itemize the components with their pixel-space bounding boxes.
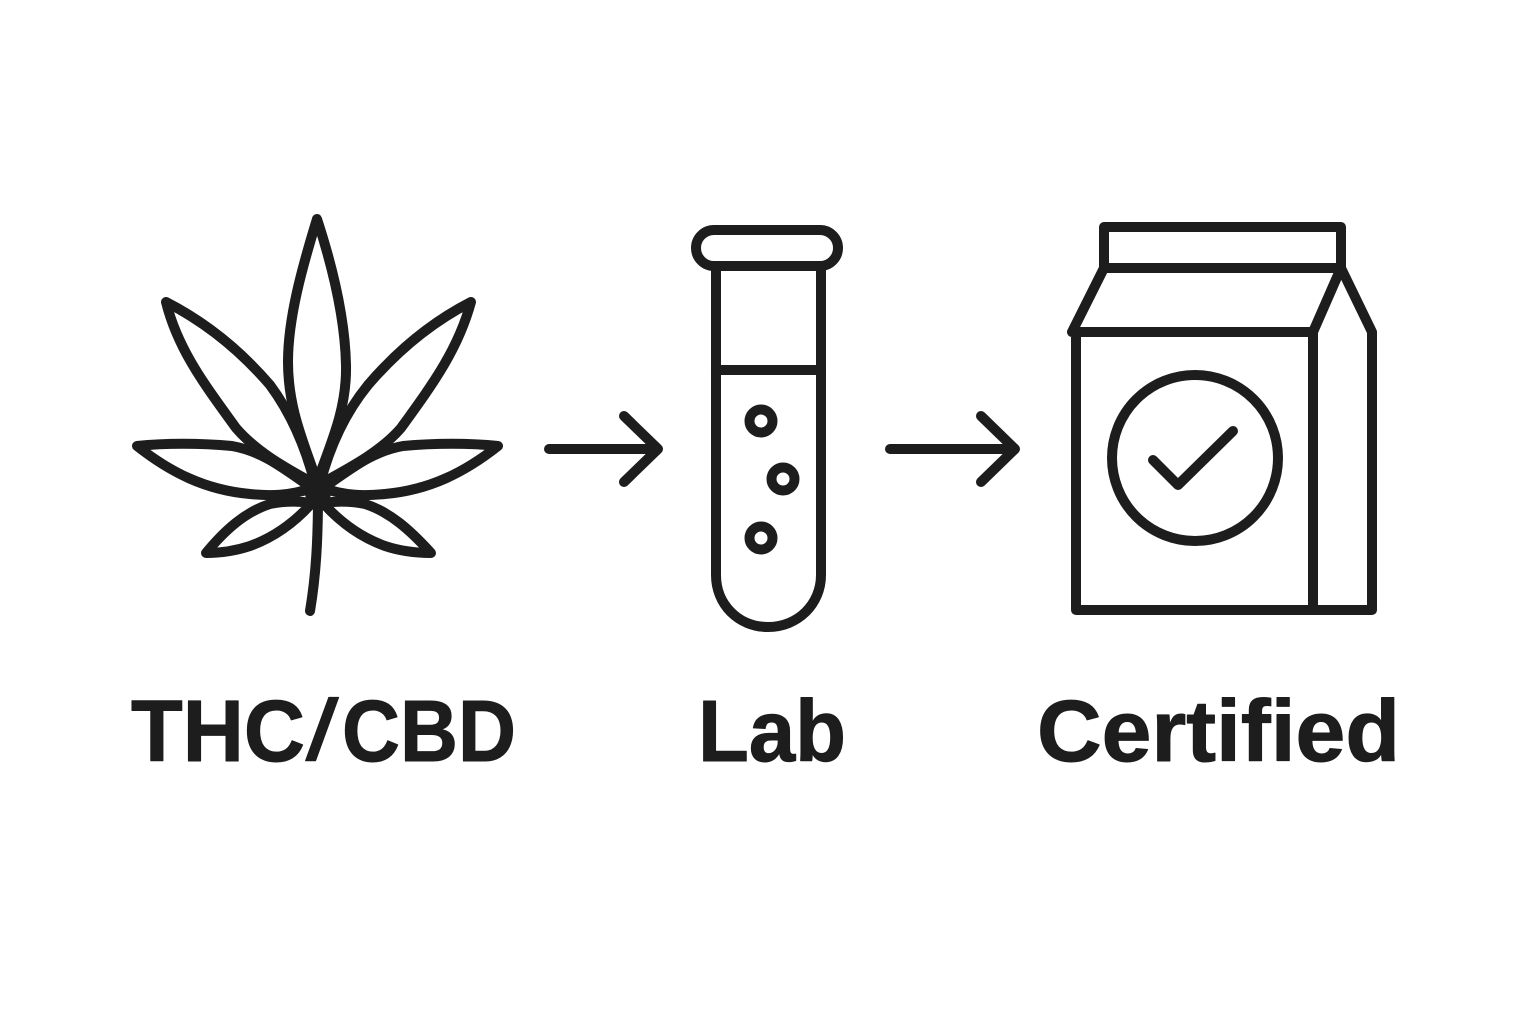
label: Certified: Certified [1037, 683, 1400, 780]
icon: test tube [696, 230, 838, 627]
label: THC/CBD [131, 683, 516, 780]
arrow: leaf to lab [549, 416, 658, 482]
icon: cannabis leaf [137, 219, 498, 611]
label: Lab: Lab [698, 683, 846, 780]
icon: certified package [1072, 227, 1372, 610]
label: THC/CBD: THC [131, 683, 305, 780]
label: THC/CBD: / [302, 683, 342, 778]
label: THC/CBD: CBD [342, 683, 516, 780]
arrow: lab to certified [890, 416, 1015, 482]
